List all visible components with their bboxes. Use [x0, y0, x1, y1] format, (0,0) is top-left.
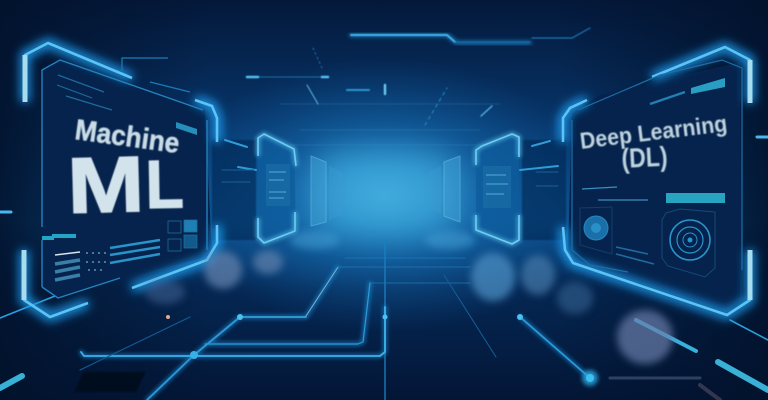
panel backing	[42, 60, 212, 298]
heading: (DL): (DL)	[621, 141, 668, 174]
distant corridor panels, left	[258, 134, 342, 243]
connector	[122, 58, 190, 92]
panel backing	[568, 62, 742, 312]
floor nodes	[74, 314, 598, 392]
floor circuit lines	[0, 240, 768, 400]
icon: large radar	[662, 209, 715, 277]
left panel: Machine ML	[24, 43, 217, 317]
inner frame	[42, 60, 207, 298]
accent bars	[582, 78, 725, 203]
heading: Deep Learning: Deep Learning	[578, 110, 729, 154]
side wall dashes	[0, 137, 768, 212]
small header lines	[57, 75, 112, 110]
bokeh lights	[145, 231, 673, 364]
ceiling circuit lines	[247, 28, 590, 145]
icon: small radar	[580, 207, 612, 254]
neon frame	[563, 47, 750, 315]
distant corridor panels, right	[429, 134, 519, 244]
right panel: Deep Learning (DL)	[563, 47, 750, 315]
letter L: L	[145, 146, 184, 223]
neon frame highlights	[24, 55, 25, 300]
heading: Machine: Machine	[73, 113, 182, 159]
inner frame	[572, 60, 742, 272]
neon frame glow	[563, 47, 750, 315]
neon frame glow	[24, 43, 217, 317]
accent bar	[176, 122, 197, 135]
heading: ML	[66, 140, 184, 230]
bottom-left data rows	[42, 236, 160, 280]
small caption lines	[616, 247, 654, 264]
neon frame highlights	[748, 60, 752, 300]
neon frame	[24, 43, 217, 317]
letter M: M	[66, 140, 145, 230]
small boxes	[168, 220, 197, 251]
